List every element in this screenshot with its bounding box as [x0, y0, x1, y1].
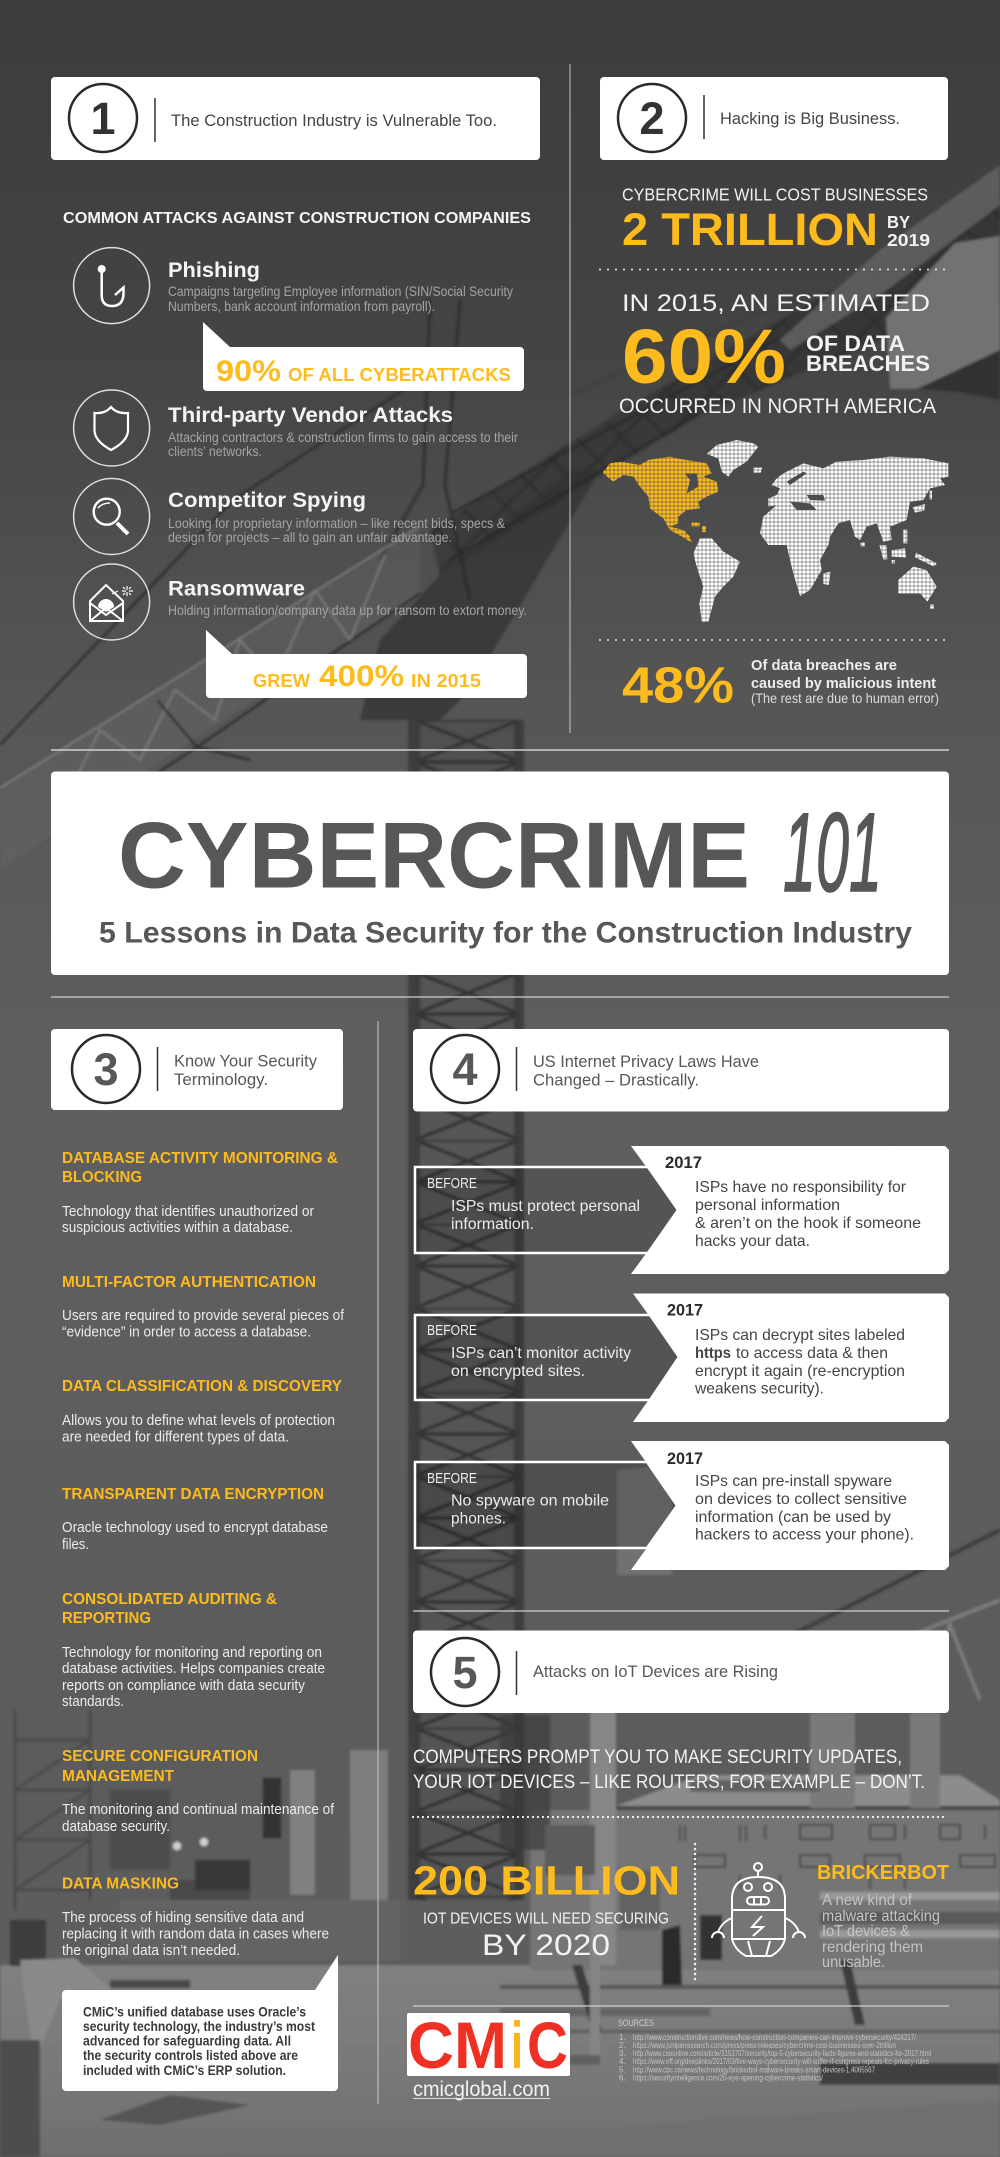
dotted world map: [603, 440, 948, 622]
comparison 2: before and 2017: to access data & then: [736, 1345, 888, 1362]
stat: 200 billion: 200 BILLION: [413, 1858, 680, 1904]
attack: competitor spying: [74, 478, 506, 554]
panel: lesson 1 heading: [51, 77, 540, 160]
term: data classification: DATA CLASSIFICATION & DISCOVERY: [62, 1378, 343, 1395]
panel: lesson 4 heading: US Internet Privacy Laws Have: [533, 1052, 759, 1071]
text: brickerbot: rendering them: [822, 1939, 923, 1956]
stat: 200 billion: BY 2020: [482, 1929, 610, 1962]
sources list: SOURCES: [618, 2018, 654, 2029]
stat: 48% malicious intent: caused by malicious intent: [751, 675, 936, 692]
heading: common attacks: COMMON ATTACKS AGAINST CONSTRUCTION COMPANIES: [63, 210, 531, 227]
term: transparent data encryption: files.: [62, 1537, 89, 1553]
vertical divider: lower columns: [377, 1021, 379, 2104]
stat: 60% of data breaches: OCCURRED IN NORTH AMERICA: [619, 395, 936, 418]
text: brickerbot: BRICKERBOT: [817, 1862, 949, 1884]
term: consolidated auditing: standards.: [62, 1694, 124, 1710]
sources list: 3.: [619, 2049, 626, 2058]
logo: CMiC: [407, 2008, 570, 2082]
callout: CMiC unified database: CMiC’s unified database uses Oracle’s: [83, 2004, 306, 2020]
sources list: http://www.cbc.ca/news/technology/brickerbot-malware-breaks-smart-devices-1.4065567: [633, 2066, 875, 2075]
sources list: 1.: [619, 2033, 626, 2042]
callout: grew 400% in 2015: [206, 630, 527, 698]
term: data masking: replacing it with random data in cases where: [62, 1927, 329, 1943]
attack: phishing: Phishing: [168, 259, 260, 282]
callout: grew 400% in 2015: GREW: [253, 670, 311, 691]
panel: lesson 4 heading: [413, 1029, 949, 1112]
comparison 2: before and 2017: 2017: [667, 1300, 703, 1320]
comparison 1: before and 2017: information.: [451, 1216, 534, 1233]
logo: CMiC: i: [511, 2008, 523, 2082]
vertical divider: top columns: [569, 64, 571, 733]
term: data classification: are needed for different types of data.: [62, 1430, 289, 1446]
term: consolidated auditing: REPORTING: [62, 1610, 151, 1627]
panel: lesson 5 heading: Attacks on IoT Devices are Rising: [533, 1662, 778, 1681]
comparison 3: before and 2017: on devices to collect sensitive: [695, 1491, 907, 1508]
attack: phishing: Campaigns targeting Employee information (SIN/Social Security: [168, 283, 513, 299]
comparison 1: before and 2017: ISPs have no responsibility for: [695, 1179, 907, 1196]
callout: CMiC unified database: [62, 1955, 338, 2091]
panel: lesson 4 heading: Changed – Drastically.: [533, 1070, 699, 1090]
sources list: 4.: [619, 2057, 626, 2066]
callout: CMiC unified database: the security controls listed above are: [83, 2048, 298, 2063]
attack: competitor spying: Looking for proprietary information – like recent bids, specs &: [168, 515, 506, 531]
stat: 60% of data breaches: IN 2015, AN ESTIMATED: [622, 290, 930, 317]
term: consolidated auditing: Technology for monitoring and reporting on: [62, 1645, 322, 1661]
sources list: http://www.constructiondive.com/news/how-construction-companies-can-improve-cybersecurity/424217/: [633, 2033, 917, 2042]
panel: lesson 2 heading: 2: [639, 93, 665, 144]
term: multi-factor authentication: [62, 1274, 345, 1341]
attack: phishing: Numbers, bank account information from payroll).: [168, 298, 435, 314]
attack: ransomware: Ransomware: [168, 578, 305, 600]
term: consolidated auditing: CONSOLIDATED AUDITING &: [62, 1591, 277, 1608]
comparison 3: before and 2017: BEFORE: [427, 1471, 477, 1487]
attack: competitor spying: Competitor Spying: [168, 489, 366, 512]
stat: 60% of data breaches: 60%: [622, 314, 786, 400]
stat: 200 billion: [413, 1858, 680, 1962]
callout: grew 400% in 2015: IN 2015: [411, 670, 481, 691]
attack: competitor spying: design for projects – all to gain an unfair advantage.: [168, 529, 452, 545]
attack: ransomware: [74, 564, 527, 640]
panel: lesson 3 heading: Terminology.: [174, 1070, 268, 1089]
term: transparent data encryption: TRANSPARENT DATA ENCRYPTION: [62, 1486, 324, 1503]
panel: lesson 2 heading: Hacking is Big Business.: [720, 109, 900, 128]
logo: CMiC: CM: [408, 2008, 507, 2082]
text: computers prompt updates: COMPUTERS PROMPT YOU TO MAKE SECURITY UPDATES,: [413, 1747, 902, 1768]
term: database activity monitoring: DATABASE ACTIVITY MONITORING &: [62, 1150, 338, 1167]
stat: 2 trillion by 2019: [622, 185, 930, 255]
comparison 2: before and 2017: encrypt it again (re-encryption: [695, 1363, 905, 1380]
term: multi-factor authentication: Users are required to provide several pieces of: [62, 1308, 345, 1324]
sources list: [618, 2018, 931, 2083]
stat: 200 billion: IOT DEVICES WILL NEED SECURING: [423, 1910, 669, 1928]
term: secure configuration: The monitoring and continual maintenance of: [62, 1802, 335, 1818]
stat: 48% malicious intent: [622, 656, 939, 714]
term: consolidated auditing: database activities. Helps companies create: [62, 1661, 325, 1677]
term: consolidated auditing: [62, 1591, 325, 1710]
stat: 48% malicious intent: 48%: [622, 656, 734, 714]
panel: lesson 5 heading: [413, 1630, 949, 1713]
term: consolidated auditing: reports on compliance with data security: [62, 1678, 306, 1694]
text: computers prompt updates: [413, 1747, 925, 1793]
callout: 90% of all cyberattacks: 90%: [216, 355, 281, 388]
term: transparent data encryption: Oracle technology used to encrypt database: [62, 1520, 328, 1536]
term: data masking: [62, 1876, 329, 1959]
text: brickerbot: malware attacking: [822, 1908, 940, 1925]
term: database activity monitoring: Technology that identifies unauthorized or: [62, 1204, 314, 1220]
icon: robot: [712, 1863, 805, 1956]
stat: 48% malicious intent: (The rest are due to human error): [751, 690, 939, 706]
text: brickerbot: unusable.: [822, 1954, 885, 1971]
comparison 2: before and 2017: on encrypted sites.: [451, 1363, 585, 1380]
comparison 1: before and 2017: personal information: [695, 1197, 840, 1214]
panel: lesson 5 heading: 5: [452, 1647, 478, 1698]
attack: ransomware: Holding information/company data up for ransom to extort money.: [168, 602, 527, 618]
comparison 1: before and 2017: 2017: [665, 1153, 702, 1172]
panel: lesson 4 heading: 4: [452, 1044, 478, 1095]
stat: 60% of data breaches: OF DATA: [806, 331, 905, 356]
term: data masking: DATA MASKING: [62, 1876, 179, 1893]
comparison 3: before and 2017: 2017: [667, 1449, 703, 1468]
callout: CMiC unified database: included with CMiC’s ERP solution.: [83, 2063, 286, 2078]
term: transparent data encryption: [62, 1486, 328, 1553]
panel: lesson 2 heading: [600, 77, 948, 160]
term: secure configuration: MANAGEMENT: [62, 1768, 174, 1785]
callout: 90% of all cyberattacks: OF ALL CYBERATTACKS: [288, 364, 511, 385]
comparison 3: before and 2017: No spyware on mobile: [451, 1493, 609, 1510]
panel: lesson 1 heading: 1: [90, 93, 116, 144]
stat: 48% malicious intent: Of data breaches are: [751, 657, 897, 674]
term: data masking: the original data isn’t needed.: [62, 1943, 240, 1959]
sources list: 6.: [619, 2074, 626, 2083]
term: secure configuration: database security.: [62, 1819, 170, 1835]
panel: lesson 3 heading: 3: [93, 1044, 119, 1095]
comparison 3: before and 2017: ISPs can pre-install spyware: [695, 1473, 892, 1490]
panel: lesson 1 heading: The Construction Industry is Vulnerable Too.: [171, 111, 497, 130]
sources list: https://securityintelligence.com/20-eye-opening-cybercrime-statistics/: [633, 2074, 824, 2083]
term: secure configuration: [62, 1748, 335, 1835]
term: data classification: Allows you to define what levels of protection: [62, 1413, 335, 1429]
stat: 2 trillion by 2019: CYBERCRIME WILL COST BUSINESSES: [622, 185, 928, 205]
attack: third-party vendor: Attacking contractors & construction firms to gain access to their: [168, 429, 518, 445]
title: cybercrime 101: CYBERCRIME: [118, 803, 750, 908]
stat: 60% of data breaches: BREACHES: [806, 351, 930, 376]
panel: lesson 3 heading: [51, 1029, 343, 1110]
comparison 2: before and 2017: https: [695, 1345, 731, 1362]
comparison 3: before and 2017: phones.: [451, 1510, 506, 1528]
comparison 2: before and 2017: ISPs can’t monitor activity: [451, 1345, 631, 1362]
title: cybercrime 101: [118, 790, 882, 915]
comparison 2: before and 2017: [415, 1294, 949, 1422]
sources list: 5.: [619, 2066, 626, 2075]
comparison 1: before and 2017: BEFORE: [427, 1176, 477, 1192]
stat: 2 trillion by 2019: 2019: [887, 230, 930, 250]
comparison 2: before and 2017: ISPs can decrypt sites labeled: [695, 1327, 905, 1344]
comparison 3: before and 2017: information (can be used by: [695, 1509, 891, 1526]
comparison 3: before and 2017: [415, 1441, 949, 1570]
sources list: 2.: [619, 2041, 626, 2050]
panel: main title: [51, 772, 949, 975]
callout: 90% of all cyberattacks: [203, 322, 524, 391]
title: cybercrime 101: 101: [783, 790, 882, 915]
term: database activity monitoring: suspicious activities within a database.: [62, 1220, 293, 1236]
logo: CMiC: C: [527, 2008, 568, 2082]
comparison 1: before and 2017: & aren’t on the hook if someone: [695, 1215, 921, 1232]
callout: CMiC unified database: security technology, the industry’s most: [83, 2019, 315, 2034]
term: secure configuration: SECURE CONFIGURATION: [62, 1748, 258, 1765]
term: database activity monitoring: BLOCKING: [62, 1169, 142, 1186]
comparison 2: before and 2017: weakens security).: [694, 1380, 824, 1398]
text: computers prompt updates: YOUR IOT DEVICES – LIKE ROUTERS, FOR EXAMPLE – DON’T.: [413, 1772, 925, 1793]
comparison 1: before and 2017: hacks your data.: [695, 1233, 810, 1250]
link: cmicglobal.com: cmicglobal.com: [413, 2078, 550, 2101]
comparison 1: before and 2017: [415, 1146, 949, 1274]
text: brickerbot: IoT devices &: [822, 1923, 910, 1940]
comparison 2: before and 2017: BEFORE: [427, 1323, 477, 1339]
term: multi-factor authentication: “evidence” in order to access a database.: [62, 1325, 311, 1341]
attack: third-party vendor: [74, 390, 518, 466]
attack: phishing: [74, 248, 513, 324]
callout: grew 400% in 2015: 400%: [319, 660, 404, 693]
stat: 2 trillion by 2019: 2 TRILLION: [622, 204, 878, 255]
comparison 3: before and 2017: hackers to access your phone).: [695, 1527, 914, 1544]
attack: third-party vendor: Third-party Vendor Attacks: [168, 404, 453, 427]
term: data classification: [62, 1378, 343, 1446]
attack: third-party vendor: clients’ networks.: [168, 443, 262, 459]
callout: CMiC unified database: advanced for safeguarding data. All: [83, 2033, 291, 2048]
term: multi-factor authentication: MULTI-FACTOR AUTHENTICATION: [62, 1274, 316, 1291]
term: database activity monitoring: [62, 1150, 338, 1236]
panel: lesson 3 heading: Know Your Security: [174, 1052, 317, 1071]
text: brickerbot: A new kind of: [822, 1892, 913, 1909]
stat: 2 trillion by 2019: BY: [887, 212, 910, 232]
term: data masking: The process of hiding sensitive data and: [62, 1910, 304, 1926]
comparison 1: before and 2017: ISPs must protect personal: [451, 1198, 640, 1215]
subtitle: 5 Lessons in Data Security for the Construction Industry: [99, 917, 912, 950]
stat: 60% of data breaches: [619, 290, 936, 418]
text: brickerbot: [817, 1862, 949, 1971]
sources list: https://www.juniperresearch.com/press/press-releases/cybercrime-cost-businesses-over-2trillion: [633, 2041, 896, 2050]
